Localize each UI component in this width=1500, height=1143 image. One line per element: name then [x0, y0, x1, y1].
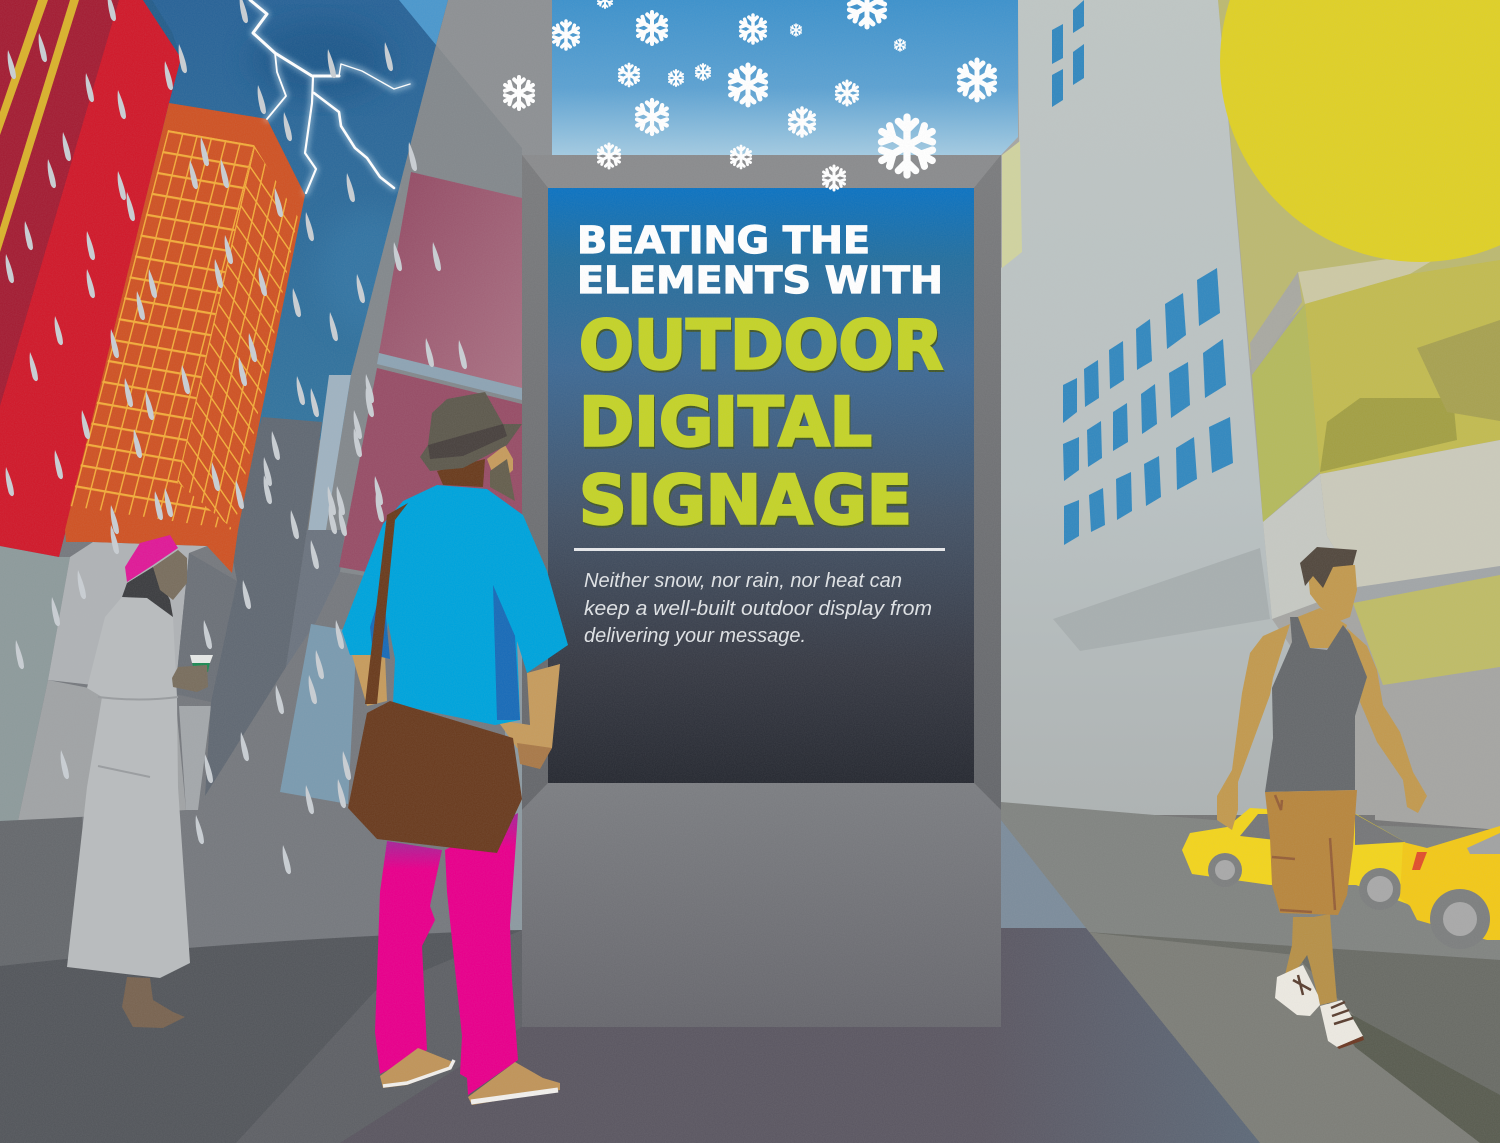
neck	[1290, 608, 1347, 648]
sneakers	[1275, 965, 1364, 1049]
arms	[352, 655, 560, 769]
brown shorts	[1265, 790, 1357, 915]
hat	[420, 392, 522, 471]
bag strap	[365, 503, 408, 704]
head and hair	[1300, 547, 1357, 622]
head	[437, 445, 515, 501]
taxi: far car	[1182, 808, 1415, 910]
legs	[1285, 914, 1337, 1005]
heading: beating the elements with	[577, 218, 943, 302]
heading: beating the elements with: ELEMENTS WITH	[577, 258, 943, 302]
background: stormy sky	[130, 0, 460, 440]
heading: beating the elements with: BEATING THE	[577, 218, 870, 262]
shirt shadows	[370, 585, 520, 720]
woman's face	[153, 550, 187, 600]
sign body text: Neither snow, nor rain, nor heat can	[584, 569, 902, 592]
sign body text: keep a well-built outdoor display from	[584, 597, 932, 620]
woman's feet	[122, 977, 185, 1028]
brown messenger bag	[348, 701, 522, 853]
yellow taxis	[1182, 808, 1500, 949]
sign body text: delivering your message.	[584, 624, 806, 647]
person: man with hat and messenger bag	[342, 392, 568, 1105]
left street buildings	[0, 417, 522, 970]
grey tank top	[1265, 617, 1367, 792]
sign screen	[548, 188, 974, 783]
heading: outdoor digital signage: SIGNAGE	[579, 462, 912, 540]
person: woman in white coat with coffee	[67, 535, 213, 1028]
lightning bolt	[250, 0, 410, 193]
sign body text	[584, 569, 932, 647]
blue shirt	[342, 485, 568, 725]
shoes	[380, 1048, 560, 1105]
kiosk frame	[522, 155, 1001, 1027]
woman's coat	[67, 597, 190, 978]
coffee cup	[190, 655, 213, 672]
sun	[1220, 0, 1500, 262]
heading: outdoor digital signage	[579, 306, 943, 540]
ground and road	[0, 802, 1500, 1143]
woman's hand	[172, 665, 208, 692]
taxi: near car	[1400, 826, 1500, 949]
building: grey block with maroon panels	[280, 0, 556, 930]
background: clear snowy sky	[552, 0, 1018, 160]
building: orange grid tower	[65, 103, 305, 573]
heading: outdoor digital signage: OUTDOOR	[579, 306, 943, 386]
woman's hair	[122, 567, 173, 617]
arms	[1217, 624, 1427, 830]
right street buildings	[1001, 0, 1500, 830]
heading: outdoor digital signage: DIGITAL	[579, 384, 872, 462]
person: man in tank top	[1217, 547, 1427, 1049]
outdoor digital sign kiosk	[522, 155, 1001, 1027]
rain drops	[6, 0, 467, 874]
snowflakes	[505, 0, 995, 190]
windows: blue on right building	[1052, 0, 1233, 545]
pink trousers	[375, 813, 518, 1095]
divider rule	[574, 548, 945, 551]
woman's pink beret	[125, 535, 178, 582]
building: red tower	[0, 0, 181, 557]
